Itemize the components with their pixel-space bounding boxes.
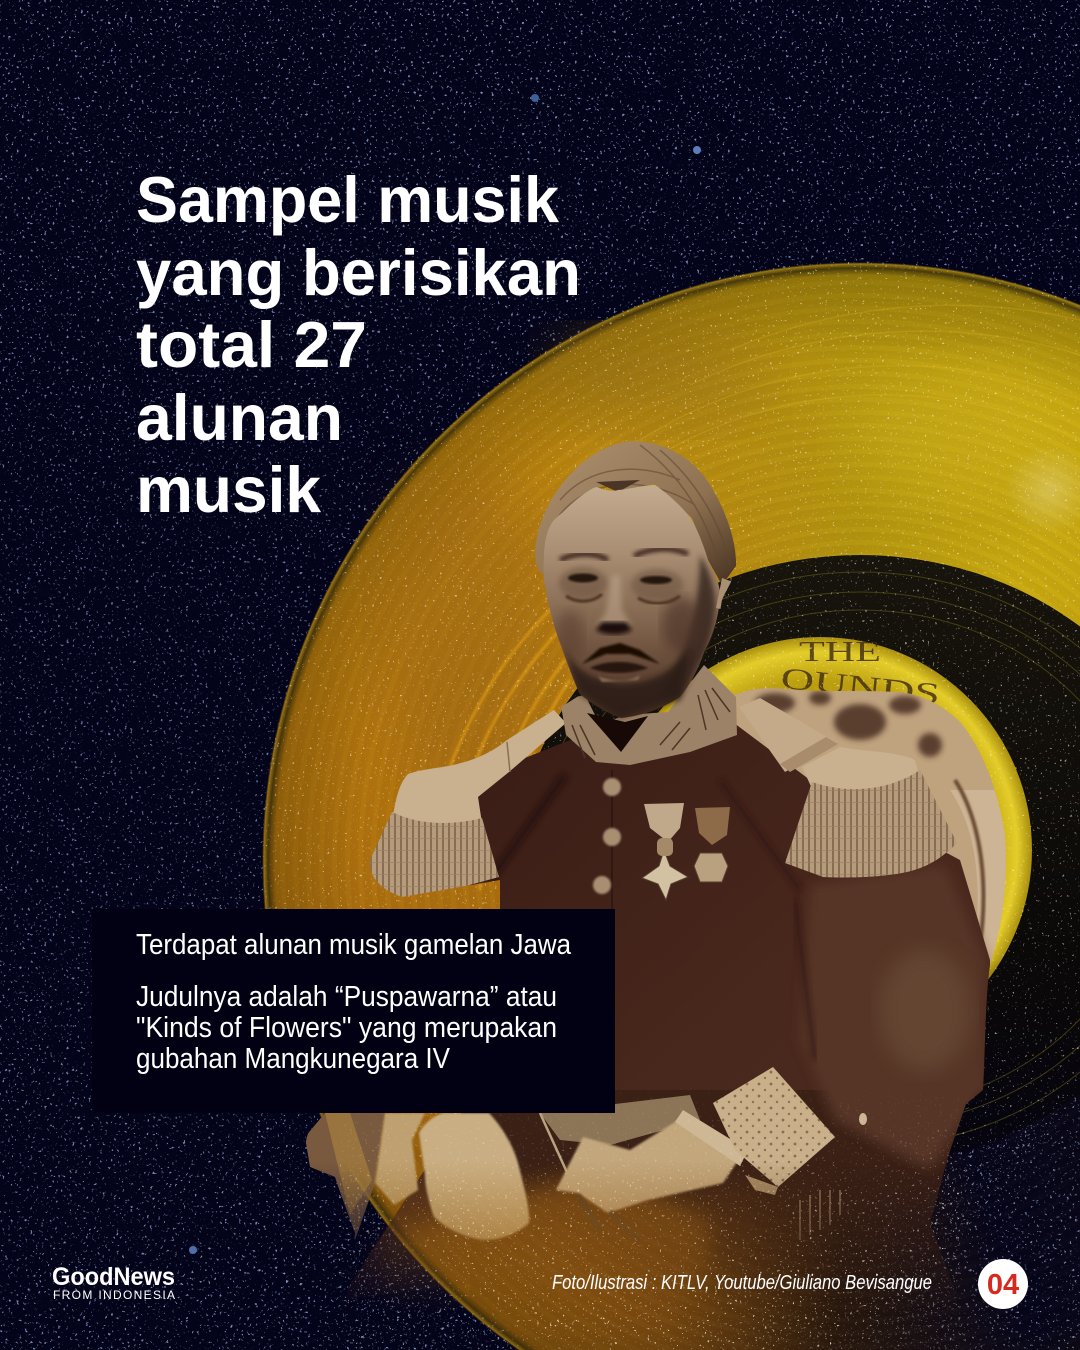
mustache and mouth — [582, 643, 660, 664]
body text: "Kinds of Flowers" yang merupakan — [136, 1012, 557, 1044]
left epaulette — [370, 710, 566, 897]
chair back — [730, 688, 1006, 965]
right epaulette — [739, 698, 957, 877]
lap fade into record — [375, 1173, 714, 1304]
title: musik — [136, 453, 322, 526]
body text: gubahan Mangkunegara IV — [136, 1043, 451, 1075]
page number badge — [978, 1259, 1028, 1309]
nose — [596, 575, 632, 626]
gloved right hand — [556, 1117, 743, 1213]
portrait: seated man in uniform — [306, 441, 1006, 1304]
golden record disc — [262, 262, 1080, 1350]
face — [544, 485, 720, 718]
right ear — [716, 578, 732, 609]
record label text: THE — [799, 637, 881, 668]
medals — [642, 803, 730, 900]
record centre: dark ring and gold label — [386, 304, 1080, 1154]
title: alunan — [136, 381, 343, 454]
logo: GoodNews from Indonesia — [52, 1263, 175, 1302]
body text: Judulnya adalah “Puspawarna” atau — [136, 981, 557, 1013]
record label text — [779, 637, 942, 711]
turban — [534, 441, 736, 585]
title: Sampel musik — [136, 163, 560, 236]
jacket sleeve and seams — [490, 770, 985, 1170]
photo credit: Foto/Ilustrasi : KITLV, Youtube/Giuliano Bevisangue — [552, 1272, 932, 1294]
record label text: OUNDS — [779, 662, 942, 711]
dust speckle over record — [262, 262, 1080, 1350]
dust speckle over lower portrait — [340, 1090, 960, 1350]
chair arm left — [305, 1113, 385, 1240]
brows and eyes — [559, 549, 688, 603]
gloved left hand — [419, 1113, 529, 1240]
title: yang berisikan — [136, 236, 581, 309]
logo: GoodNews from Indonesia: FROM INDONESIA — [53, 1288, 175, 1302]
sword tassel — [800, 1190, 840, 1240]
page number badge: 04 — [987, 1269, 1019, 1301]
collar — [560, 665, 737, 765]
title — [136, 163, 581, 526]
buttons — [532, 718, 622, 896]
lace cuff — [713, 1067, 835, 1187]
jacket body — [340, 720, 990, 1300]
tonal variation on gold surface — [380, 330, 1080, 810]
title: total 27 — [136, 308, 367, 381]
logo: GoodNews from Indonesia: GoodNews — [52, 1263, 175, 1291]
text panel box — [92, 909, 615, 1113]
belt and sash — [540, 1095, 700, 1145]
body text: Terdapat alunan musik gamelan Jawa — [136, 929, 572, 961]
body text — [136, 929, 572, 1075]
